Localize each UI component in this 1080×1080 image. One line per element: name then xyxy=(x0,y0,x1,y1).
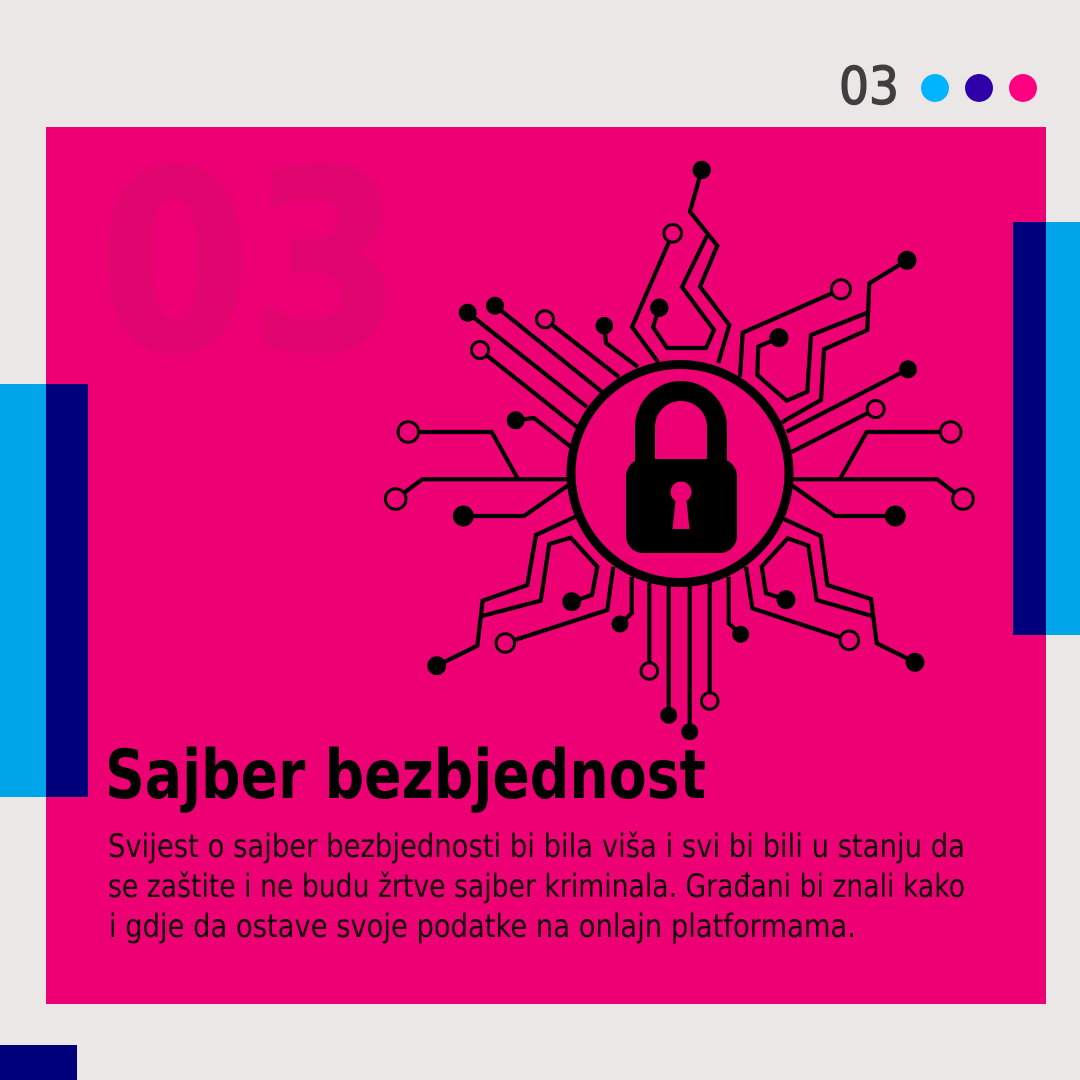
left accent navy overlap xyxy=(46,384,88,797)
traces: left xyxy=(385,479,570,526)
traces: top xyxy=(632,161,729,363)
header dots xyxy=(921,74,1037,102)
body text: i gdje da ostave svoje podatke na onlajn platformama. xyxy=(109,907,856,945)
traces: upper right xyxy=(740,251,973,509)
traces: lower right xyxy=(729,484,924,672)
watermark number: 0 xyxy=(99,120,250,408)
body text xyxy=(108,827,965,945)
lock ring xyxy=(571,364,789,582)
traces: lower left xyxy=(427,516,632,675)
right accent bar xyxy=(1046,222,1080,635)
padlock xyxy=(626,391,737,553)
watermark number xyxy=(99,120,401,408)
bottom corner accent xyxy=(0,1045,77,1080)
header number: 03 xyxy=(839,57,899,117)
right accent bar navy overlap xyxy=(1013,222,1046,635)
icon: circuit padlock xyxy=(385,161,973,740)
title: Sajber bezbjednost xyxy=(105,736,706,815)
panel: main pink card xyxy=(46,127,1046,1004)
traces: upper left xyxy=(398,297,638,479)
left accent bar xyxy=(0,384,46,797)
body text: Svijest o sajber bezbjednosti bi bila viša i svi bi bili u stanju da xyxy=(108,827,965,865)
watermark number: 3 xyxy=(252,120,401,408)
traces: bottom xyxy=(641,583,718,740)
